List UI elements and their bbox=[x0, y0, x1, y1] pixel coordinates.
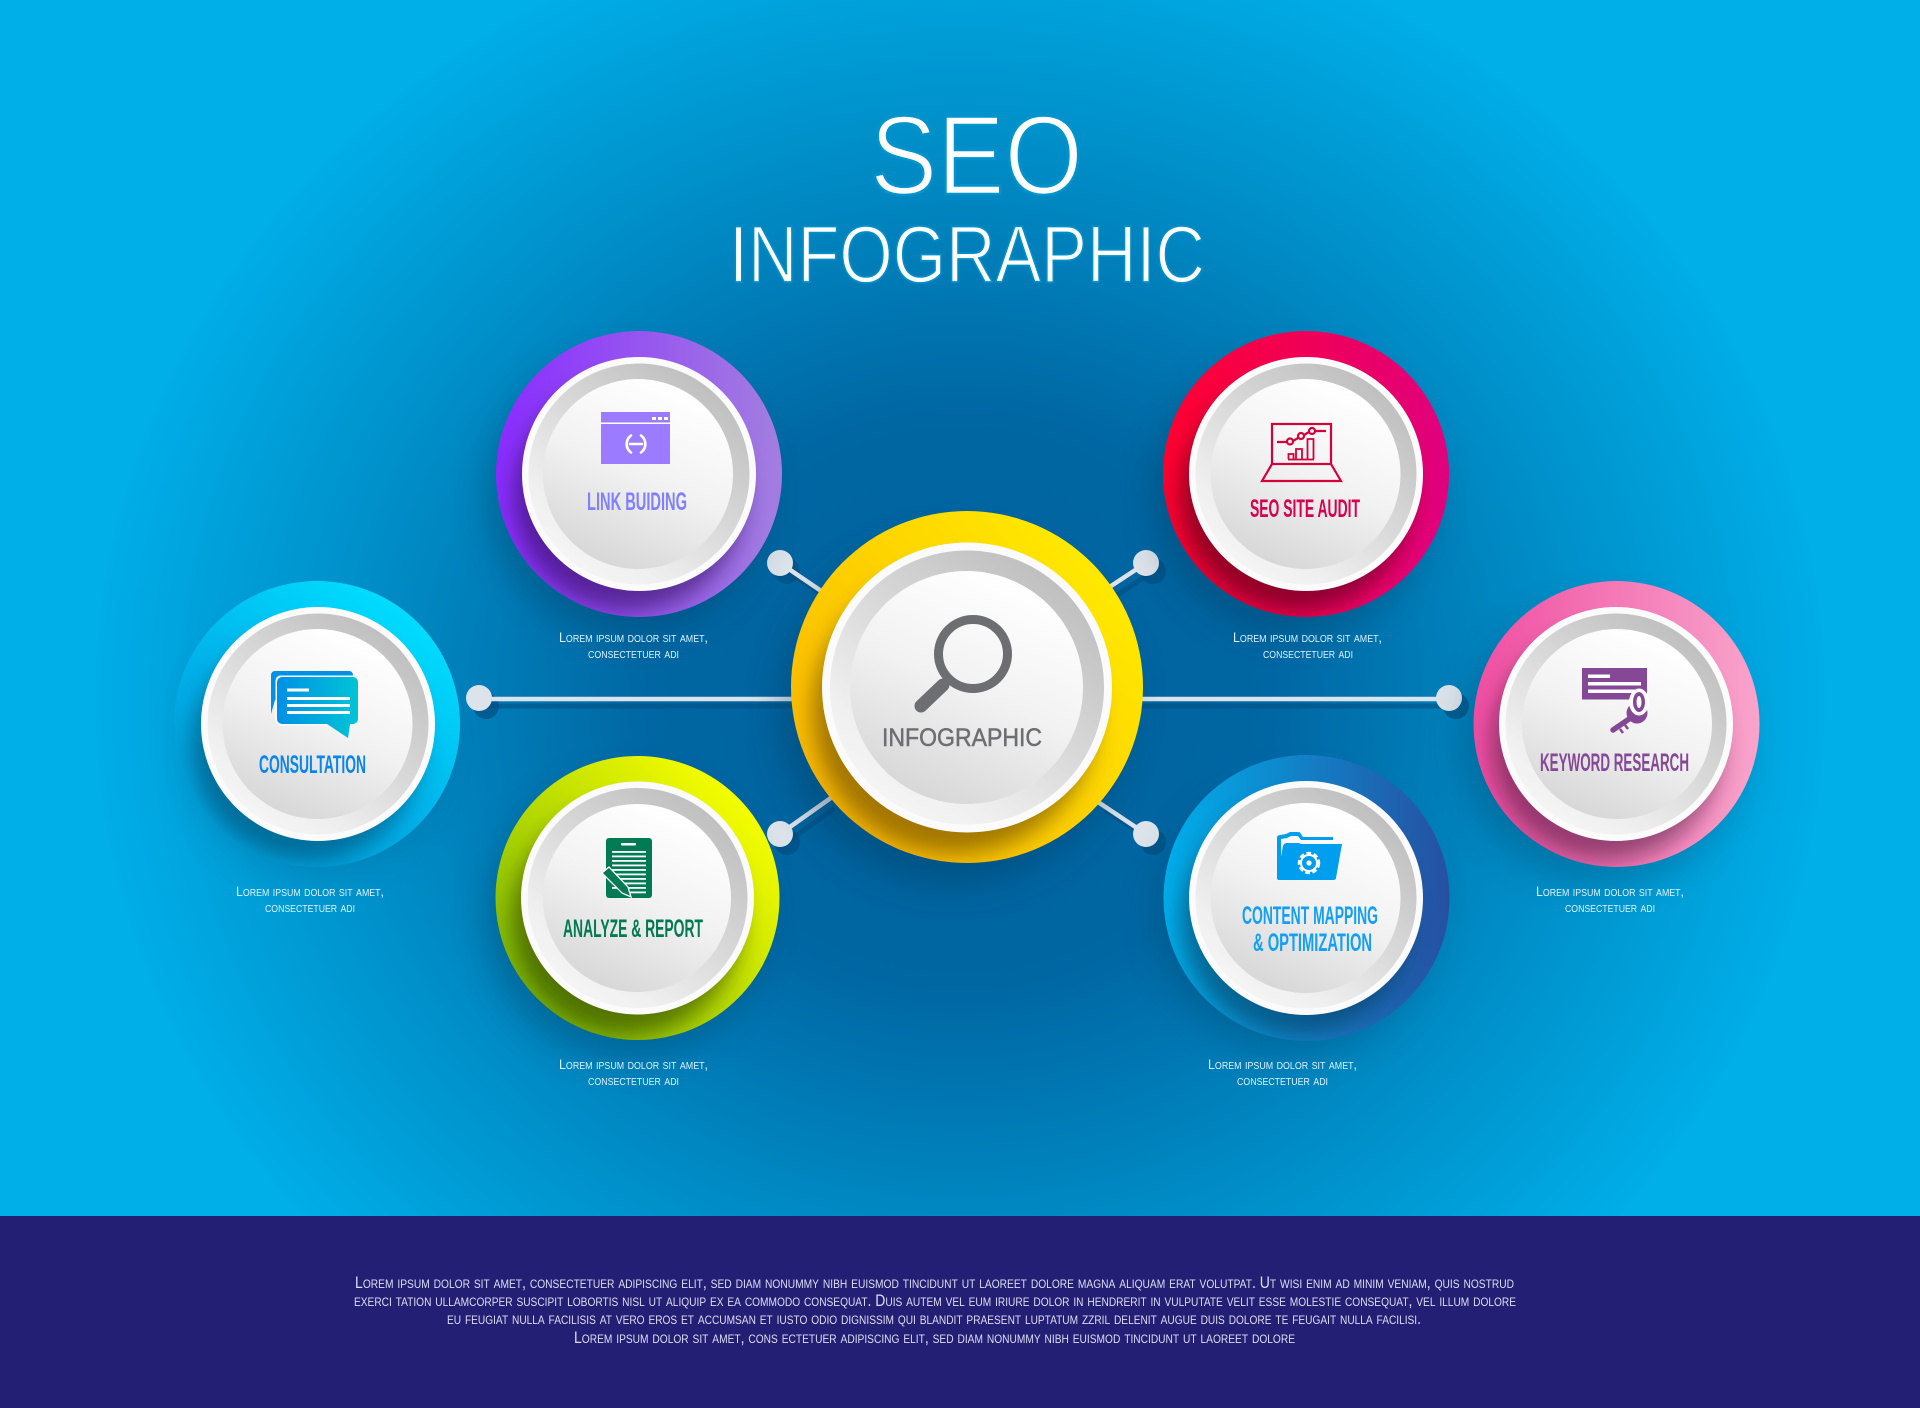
connectors bbox=[466, 550, 1469, 855]
node: seo site audit bbox=[1153, 331, 1449, 635]
caption: analyze and report: consectetuer adi bbox=[588, 1072, 679, 1088]
icon: clipboard report bbox=[602, 838, 652, 898]
footer band bbox=[0, 1216, 1920, 1408]
caption: analyze and report bbox=[559, 1056, 708, 1088]
footer text: exerci tation ullamcorper suscipit lobortis nisl ut aliquip ex ea commodo consequat. Duis autem vel eum iriure dolor in hendrerit in vulputate velit esse molestie consequat, vel illum dolore bbox=[354, 1292, 1516, 1310]
node: central infographic bbox=[779, 511, 1143, 886]
icon: magnifying glass bbox=[921, 620, 1008, 706]
caption: analyze and report: Lorem ipsum dolor sit amet, bbox=[559, 1056, 708, 1072]
caption: link building bbox=[559, 629, 708, 661]
label: infographic: INFOGRAPHIC bbox=[882, 724, 1042, 752]
label: content mapping and optimization bbox=[1242, 902, 1378, 957]
caption: consultation: consectetuer adi bbox=[265, 899, 355, 915]
icon: folder gear bbox=[1277, 832, 1342, 880]
caption: content mapping bbox=[1208, 1056, 1357, 1088]
label: link building: LINK BUIDING bbox=[587, 488, 687, 516]
label: seo site audit: SEO SITE AUDIT bbox=[1250, 495, 1360, 523]
icon: chat bubbles bbox=[271, 671, 360, 738]
node: content mapping bbox=[1158, 755, 1450, 1056]
caption: keyword research: Lorem ipsum dolor sit amet, bbox=[1536, 883, 1684, 899]
caption: seo site audit: consectetuer adi bbox=[1263, 645, 1353, 661]
footer text: Lorem ipsum dolor sit amet, cons ectetuer adipiscing elit, sed diam nonummy nibh euismod tincidunt ut laoreet dolore bbox=[574, 1329, 1295, 1347]
caption: consultation bbox=[236, 883, 384, 915]
caption: keyword research bbox=[1536, 883, 1684, 915]
footer text: Lorem ipsum dolor sit amet, consectetuer adipiscing elit, sed diam nonummy nibh euismod tincidunt ut laoreet dolore magna aliquam erat volutpat. Ut wisi enim ad minim veniam, quis nostrud bbox=[355, 1274, 1514, 1292]
label: keyword research: KEYWORD RESEARCH bbox=[1540, 749, 1689, 777]
icon: keyword key bbox=[1582, 668, 1649, 733]
icon: browser link bbox=[601, 412, 670, 464]
caption: link building: Lorem ipsum dolor sit amet, bbox=[559, 629, 708, 645]
node: analyze and report bbox=[485, 756, 780, 1058]
label: content mapping and optimization: & OPTIMIZATION bbox=[1253, 929, 1372, 957]
caption: link building: consectetuer adi bbox=[588, 645, 679, 661]
node: consultation bbox=[174, 581, 460, 876]
title: INFOGRAPHIC bbox=[729, 210, 1205, 300]
title bbox=[729, 93, 1205, 300]
title: SEO bbox=[870, 93, 1083, 218]
node: keyword research bbox=[1463, 581, 1760, 885]
label: consultation: CONSULTATION bbox=[259, 751, 366, 779]
footer text bbox=[354, 1274, 1516, 1347]
label: content mapping and optimization: CONTENT MAPPING bbox=[1242, 902, 1378, 930]
caption: seo site audit bbox=[1233, 629, 1382, 661]
footer text: eu feugiat nulla facilisis at vero eros et accumsan et iusto odio dignissim qui blandit praesent luptatum zzril delenit augue duis dolore te feugait nulla facilisi. bbox=[447, 1310, 1421, 1328]
label: analyze and report: ANALYZE & REPORT bbox=[563, 915, 703, 943]
node: link building bbox=[486, 331, 782, 635]
caption: content mapping: consectetuer adi bbox=[1237, 1072, 1328, 1088]
caption: consultation: Lorem ipsum dolor sit amet, bbox=[236, 883, 384, 899]
icon: laptop chart bbox=[1262, 424, 1341, 481]
caption: content mapping: Lorem ipsum dolor sit amet, bbox=[1208, 1056, 1357, 1072]
caption: keyword research: consectetuer adi bbox=[1565, 899, 1655, 915]
caption: seo site audit: Lorem ipsum dolor sit amet, bbox=[1233, 629, 1382, 645]
